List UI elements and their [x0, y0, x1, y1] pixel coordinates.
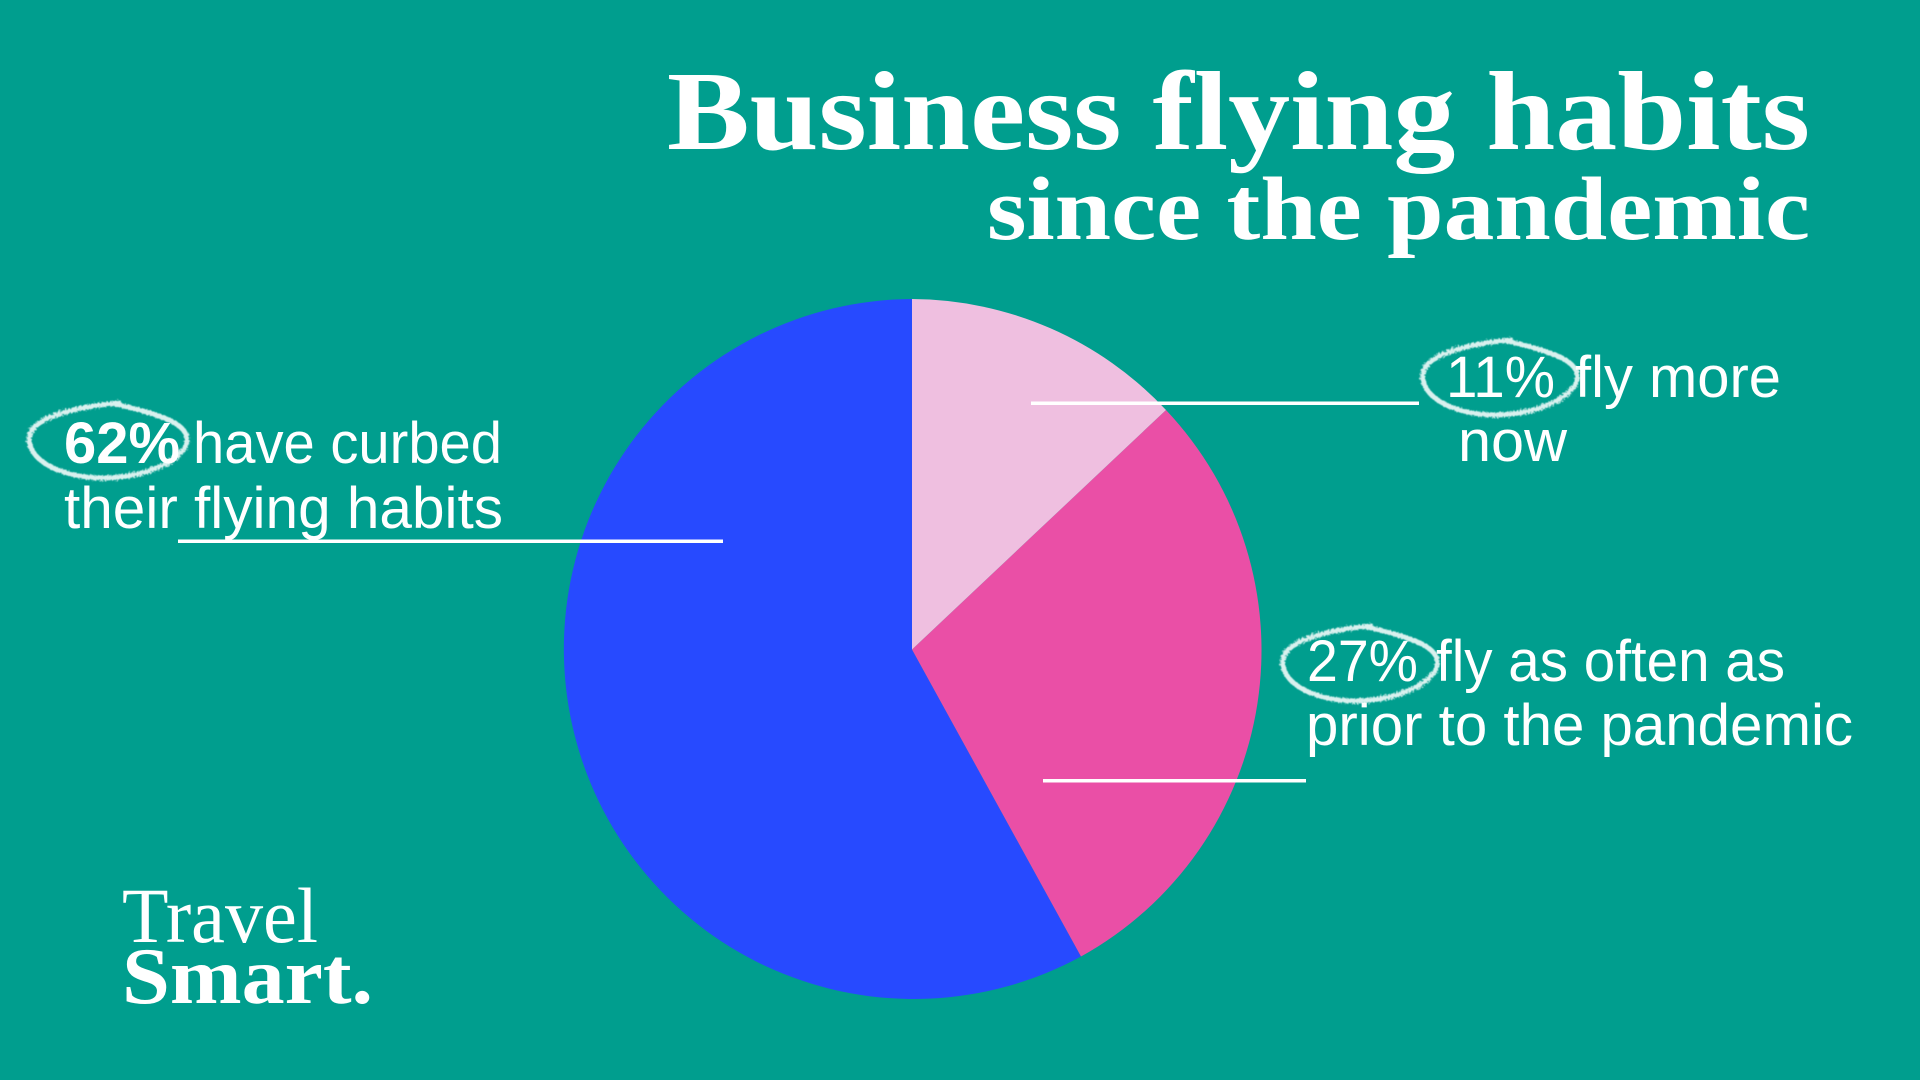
pie chart — [564, 299, 1262, 999]
label text line 2: their flying habits — [64, 476, 503, 541]
label text: fly more — [1575, 345, 1781, 410]
slice: 27% fly as often — [912, 410, 1262, 956]
callout: 11% — [1031, 340, 1781, 474]
label text: have curbed — [193, 411, 502, 476]
hand-drawn circle — [1423, 340, 1577, 415]
percentage: 27% — [1307, 629, 1418, 694]
percentage: 62% — [64, 411, 180, 476]
hand-drawn circle — [29, 403, 187, 478]
leader line — [1031, 402, 1419, 405]
leader line — [178, 540, 723, 543]
slice: 62% have curbed — [564, 299, 1081, 999]
logo word: Smart.: Smart. — [122, 933, 373, 1021]
callout: 27% — [1043, 626, 1853, 782]
hand-drawn circle — [1283, 626, 1437, 701]
leader line — [1043, 779, 1306, 782]
label text: fly as often as — [1436, 629, 1785, 694]
label text line 2: now — [1458, 409, 1568, 474]
title line 1: Business flying habits — [667, 50, 1810, 174]
logo: Travel Smart — [122, 872, 373, 1021]
title line 2: since the pandemic — [987, 160, 1810, 259]
percentage: 11% — [1446, 345, 1555, 410]
slice: 11% fly more — [912, 299, 1166, 650]
logo word: Travel: Travel — [122, 872, 318, 959]
title — [667, 50, 1810, 259]
callout: 62% — [29, 403, 723, 543]
label text line 2: prior to the pandemic — [1306, 693, 1853, 758]
